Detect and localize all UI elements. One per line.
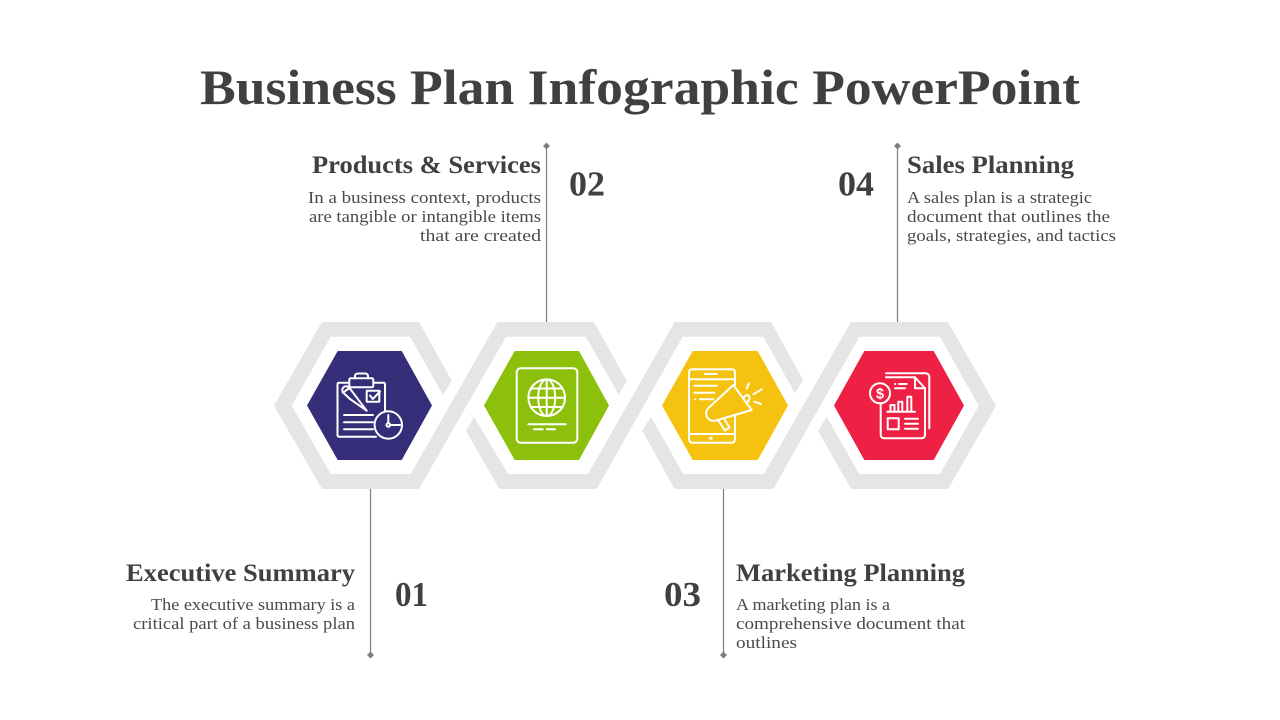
text block: marketing planning: Marketing Planning: [736, 558, 965, 587]
icon: clipboard with clock: [338, 374, 402, 439]
hexagon chain frame: [274, 322, 996, 489]
hexagon: marketing planning: [662, 351, 788, 460]
text block: executive summary: [126, 558, 356, 633]
text block: products and services: Products & Services: [312, 150, 541, 179]
connector line: 01: [367, 489, 374, 658]
title: Business Plan Infographic PowerPoint: [200, 59, 1080, 115]
text block: products and services: In a business context, products: [308, 188, 541, 207]
number: 04: 04: [838, 164, 874, 204]
number: 01: 01: [395, 575, 428, 614]
icon glyph: dollar sign: $: [876, 386, 884, 402]
number: 02: 02: [569, 164, 605, 204]
text block: sales planning: document that outlines the: [907, 207, 1110, 226]
text block: products and services: are tangible or intangible items: [309, 207, 541, 226]
text block: products and services: [308, 150, 542, 245]
text block: marketing planning: outlines: [736, 633, 797, 652]
text block: executive summary: critical part of a business plan: [133, 614, 356, 633]
connector line: 04: [894, 142, 901, 322]
text block: executive summary: Executive Summary: [126, 558, 355, 587]
text block: marketing planning: comprehensive document that: [736, 614, 965, 633]
icon: financial report with dollar: [870, 373, 929, 438]
text block: sales planning: A sales plan is a strategic: [907, 188, 1092, 207]
text block: marketing planning: A marketing plan is a: [736, 595, 890, 614]
icon: passport with globe: [517, 368, 577, 443]
icon: phone with megaphone: [689, 369, 762, 443]
text block: products and services: that are created: [420, 226, 542, 245]
hexagon: products and services: [484, 351, 609, 460]
text block: executive summary: The executive summary is a: [151, 595, 355, 614]
hexagon: sales planning: [834, 351, 964, 460]
hexagon: executive summary: [307, 351, 432, 460]
connector line: 03: [720, 489, 727, 658]
text block: sales planning: [907, 150, 1116, 245]
number: 03: 03: [664, 575, 701, 614]
text block: sales planning: goals, strategies, and tactics: [907, 226, 1116, 245]
connector line: 02: [543, 142, 550, 322]
text block: sales planning: Sales Planning: [907, 150, 1074, 179]
text block: marketing planning: [736, 558, 965, 652]
